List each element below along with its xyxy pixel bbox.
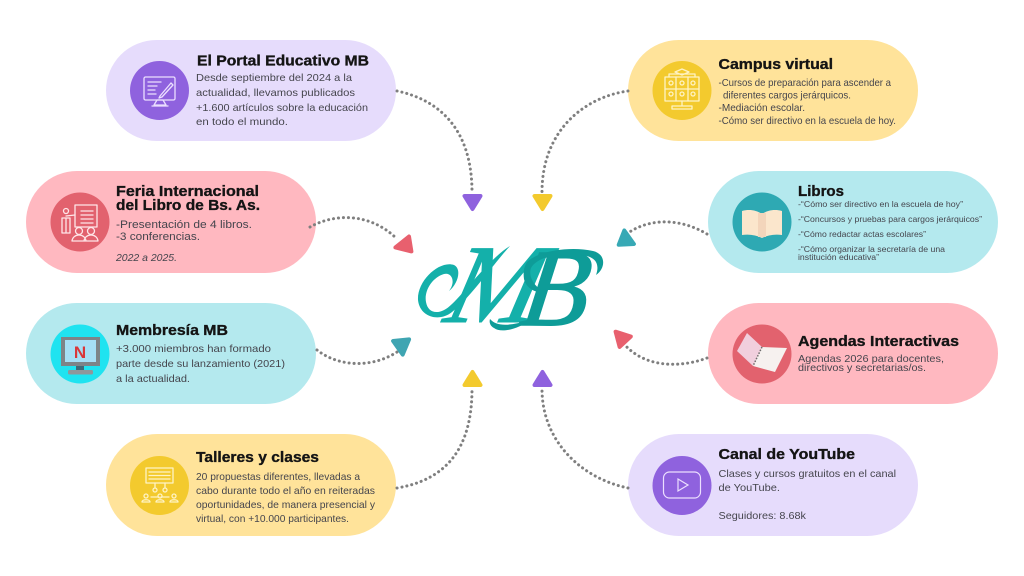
- logo: MB monogram: M: [434, 223, 565, 347]
- text block: [196, 471, 376, 525]
- text block: -Presentación de 4 libros.: [116, 219, 252, 231]
- text block: +1.600 artículos sobre la educación: [196, 102, 368, 114]
- text block: +3.000 miembros han formado: [116, 343, 271, 355]
- icon: open book: [732, 192, 792, 252]
- text block: Clases y cursos gratuitos en el canal: [718, 468, 896, 480]
- text block: -“Cómo redactar actas escolares”: [798, 229, 926, 239]
- arrow: YouTube to logo: [534, 372, 628, 488]
- text block: [718, 77, 896, 127]
- text block: -Mediación escolar.: [718, 102, 805, 114]
- heading: Canal de YouTube: [718, 446, 855, 463]
- heading: del Libro de Bs. As.: [116, 197, 260, 214]
- icon: board and audience: [130, 456, 189, 515]
- heading: Libros: [798, 183, 844, 200]
- arrow: Portal to logo: [397, 91, 480, 209]
- text block: virtual, con +10.000 participantes.: [196, 513, 349, 525]
- heading: Agendas Interactivas: [798, 333, 959, 350]
- panel: Feria Internacional del Libro: [26, 171, 316, 273]
- icon: presenter and audience: [50, 192, 110, 252]
- arrow: Feria to logo: [310, 218, 411, 251]
- panel: Agendas Interactivas: [708, 303, 998, 404]
- text block: actualidad, llevamos publicados: [196, 87, 355, 99]
- text block: en todo el mundo.: [196, 116, 288, 128]
- text block: -Cómo ser directivo en la escuela de hoy.: [718, 115, 896, 127]
- text block: [116, 343, 285, 385]
- text block: [115, 219, 252, 264]
- text block: -“Cómo organizar la secretaría de una: [798, 244, 945, 254]
- logo: MB monogram: B: [515, 226, 599, 349]
- text block: Agendas 2026 para docentes,: [798, 353, 944, 365]
- text block: -3 conferencias.: [116, 231, 200, 243]
- text block: de YouTube.: [718, 482, 780, 494]
- heading: Campus virtual: [718, 56, 833, 73]
- arrow: Libros to logo: [619, 222, 707, 245]
- text block: -“Concursos y pruebas para cargos jerárquicos”: [798, 214, 982, 224]
- icon: virtual campus monitor: [652, 61, 712, 120]
- icon: video play: [652, 456, 712, 515]
- text block: Desde septiembre del 2024 a la: [196, 72, 352, 84]
- heading: [116, 183, 260, 214]
- icon: computer with pencil: [130, 61, 189, 120]
- arrow: Campus to logo: [534, 91, 628, 209]
- icon: spiral notebook: [732, 324, 792, 384]
- heading: El Portal Educativo MB: [197, 52, 369, 70]
- heading: Feria Internacional: [116, 183, 259, 200]
- heading: Membresía MB: [116, 322, 228, 339]
- arrow: Talleres to logo: [397, 372, 480, 488]
- arrow: Agendas to logo: [616, 332, 707, 364]
- text block: -Cursos de preparación para ascender a: [718, 77, 891, 89]
- text block: -“Cómo ser directivo en la escuela de hoy”: [798, 199, 963, 209]
- text block: institución educativa”: [798, 252, 879, 262]
- arrow: Membresia to logo: [317, 339, 409, 364]
- text block: 2022 a 2025.: [115, 252, 177, 264]
- icon: monitor with N: N: [74, 343, 86, 362]
- heading: Talleres y clases: [196, 449, 319, 466]
- text block: [798, 353, 944, 374]
- text block: parte desde su lanzamiento (2021): [116, 358, 285, 370]
- text block: 20 propuestas diferentes, llevadas a: [196, 471, 360, 483]
- text block: a la actualidad.: [116, 373, 190, 385]
- panel: Talleres y clases: [106, 434, 396, 536]
- logo: MB monogram: [418, 223, 603, 349]
- text block: Seguidores: 8.68k: [718, 510, 807, 522]
- text block: [196, 72, 368, 128]
- text block: [718, 468, 896, 522]
- text block: directivos y secretarias/os.: [798, 362, 926, 374]
- panel: Canal de YouTube: [628, 434, 918, 536]
- text block: diferentes cargos jerárquicos.: [723, 90, 851, 102]
- panel: El Portal Educativo MB: [106, 40, 396, 141]
- text block: oportunidades, de manera presencial y: [196, 499, 376, 511]
- panel: Campus virtual: [628, 40, 918, 141]
- icon: monitor with N: [50, 324, 110, 384]
- panel: Libros: [708, 171, 998, 273]
- text block: cabo durante todo el año en reiteradas: [196, 485, 375, 497]
- panel: Membresía MB: [26, 303, 316, 404]
- text block: [798, 199, 982, 262]
